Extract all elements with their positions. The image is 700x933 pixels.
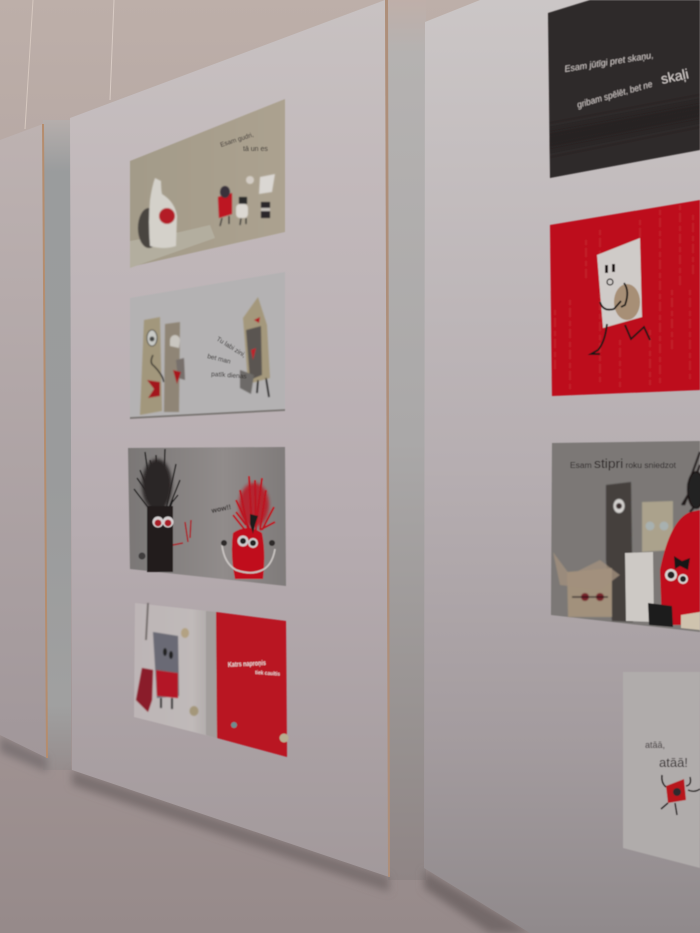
- card: beige scene with characters: tā un es: [243, 146, 268, 153]
- caption: Katrs naproņis: [228, 660, 266, 669]
- left tall figure: [140, 317, 164, 415]
- card: black and red creatures: [128, 447, 286, 586]
- card: red with cookie character: [550, 200, 700, 396]
- white figure: [597, 238, 642, 328]
- tan figure: [642, 501, 673, 552]
- character: [136, 603, 198, 716]
- red figure: [660, 510, 700, 625]
- caption: atāā,: [645, 740, 665, 750]
- middle tall figure: [164, 322, 185, 412]
- card: group portrait: [551, 441, 700, 632]
- panel: right board: [424, 0, 700, 933]
- right tall figure: [240, 297, 270, 397]
- card: dark text card: [540, 0, 700, 178]
- black hair figure: [682, 452, 700, 512]
- caption: Esam gudri,: [219, 131, 255, 149]
- caption: Esam jūtīgi pret skaņu,: [564, 50, 654, 74]
- card: dark text card: skaļi: [659, 65, 690, 87]
- panel: left board: [0, 124, 48, 758]
- card: small red character: [623, 672, 700, 868]
- buttons: [231, 722, 237, 728]
- small black figure: [648, 603, 673, 627]
- caption: [228, 660, 280, 678]
- caption: bet man: [207, 353, 232, 366]
- caption: tiek cauītis: [255, 670, 280, 678]
- big creature: [138, 178, 177, 248]
- furry figure with glasses: [553, 552, 620, 617]
- caption: wow!!: [210, 504, 232, 515]
- card: character with red door: [134, 603, 288, 757]
- panel: centre board: [70, 0, 390, 877]
- white figure: [625, 552, 654, 622]
- three small characters: [218, 174, 275, 226]
- caption: Esam stipri roku sniedzot: [570, 456, 677, 471]
- cream figure: [681, 612, 700, 630]
- card: small red character: atāā!: [659, 755, 688, 770]
- caption: Tu labi zini,: [215, 336, 247, 359]
- ground strip: [130, 225, 215, 268]
- dark figure: [606, 482, 633, 622]
- red creature: [221, 476, 275, 579]
- card: dark text card: gribam spēlēt, bet ne: [576, 79, 654, 110]
- black creature: [134, 449, 191, 572]
- character: [661, 775, 700, 815]
- card: grey scene with tall figures: [130, 272, 285, 419]
- caption: patīk dienas: [211, 371, 248, 381]
- caption: [207, 336, 248, 381]
- card: beige scene with characters: [130, 99, 285, 268]
